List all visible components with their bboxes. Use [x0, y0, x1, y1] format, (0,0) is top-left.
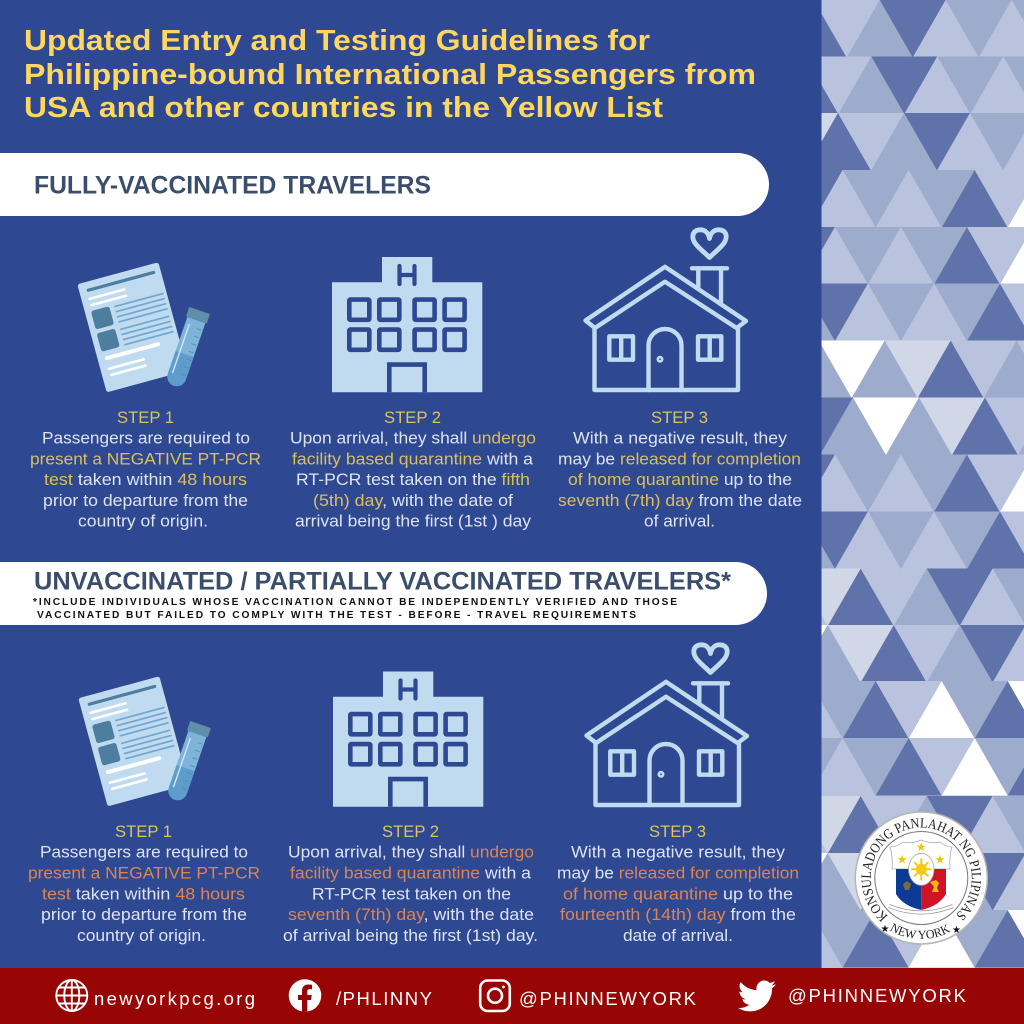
note: unvaccinated definition: *INCLUDE INDIVIDUALS WHOSE VACCINATION CANNOT BE INDEPENDENTLY VERIFIED AND THOSE [33, 597, 677, 608]
text block: step 1 unvaccinated: prior to departure from the [41, 905, 247, 924]
icon: hospital [333, 672, 483, 807]
icon: house with heart [586, 645, 747, 805]
panel: triangle pattern [762, 0, 1024, 968]
text block: step 3 fully vaccinated: may be released for completion [558, 450, 801, 468]
text block: step 2 fully vaccinated: Upon arrival, they shall undergo [290, 428, 536, 448]
seal: Konsuladong Panlahat ng Pilipinas New York: ★ [880, 924, 890, 935]
text block: step 3 fully vaccinated: of home quarantine up to the [568, 470, 792, 489]
text block: step 3 unvaccinated: fourteenth (14th) day from the [560, 905, 796, 924]
title: Philippine-bound International Passengers from [24, 59, 756, 91]
icon: instagram [480, 980, 510, 1011]
text block: step 3 fully vaccinated: STEP 3 [651, 408, 708, 427]
text block: step 2 unvaccinated: seventh (7th) day , with the date [288, 905, 534, 924]
text block: step 3 unvaccinated: With a negative result, they [571, 843, 786, 862]
footer: website: newyorkpcg.org [94, 988, 255, 1009]
title: Updated Entry and Testing Guidelines for [24, 25, 650, 57]
icon: house with heart [586, 230, 746, 390]
title: USA and other countries in the Yellow List [24, 92, 663, 124]
text block: step 2 unvaccinated: Upon arrival, they shall undergo [288, 843, 534, 862]
text block: step 3 unvaccinated: STEP 3 [649, 822, 706, 841]
note: unvaccinated definition [33, 597, 677, 621]
text block: step 1 unvaccinated: test taken within 48 hours [42, 884, 245, 904]
footer: instagram: @PHINNEWYORK [519, 988, 697, 1009]
text block: step 2 unvaccinated: RT-PCR test taken on the [312, 884, 511, 904]
text block: step 2 fully vaccinated [290, 408, 536, 531]
footer: twitter: @PHINNEWYORK [788, 985, 967, 1006]
text block: step 3 fully vaccinated: With a negative result, they [573, 428, 788, 448]
text block: step 2 unvaccinated [283, 822, 538, 945]
text block: step 3 fully vaccinated: seventh (7th) day from the date [558, 491, 802, 510]
footer: website [56, 980, 255, 1011]
text block: step 3 unvaccinated: may be released for completion [557, 864, 799, 882]
text block: step 1 fully vaccinated: Passengers are required to [42, 428, 250, 448]
text block: step 1 unvaccinated [28, 822, 260, 945]
text block: step 2 fully vaccinated: RT-PCR test taken on the fifth [296, 470, 530, 489]
text block: step 1 fully vaccinated: test taken within 48 hours [44, 470, 247, 489]
text block: step 1 fully vaccinated: STEP 1 [117, 408, 174, 427]
seal: Konsuladong Panlahat ng Pilipinas New York: ★ [934, 852, 945, 866]
panel: unvaccinated heading bar [0, 562, 767, 625]
text block: step 2 unvaccinated: facility based quarantine with a [290, 864, 532, 882]
text block: step 1 fully vaccinated [30, 408, 261, 531]
text block: step 3 unvaccinated: date of arrival. [623, 926, 733, 945]
text block: step 1 unvaccinated: present a NEGATIVE PT-PCR [28, 864, 260, 882]
text block: step 2 fully vaccinated: facility based quarantine with a [292, 450, 534, 468]
footer: twitter [738, 981, 967, 1011]
note: unvaccinated definition: VACCINATED BUT FAILED TO COMPLY WITH THE TEST - BEFORE - TRAVEL REQUIREMENTS [37, 610, 636, 621]
seal: Konsuladong Panlahat ng Pilipinas New York: KONSULADONG PANLAHAT NG PILIPINAS [862, 818, 981, 922]
icon: facebook [289, 979, 321, 1012]
footer: facebook: /PHLINNY [336, 988, 432, 1009]
text block: step 2 unvaccinated: STEP 2 [382, 822, 439, 841]
text block: step 1 unvaccinated: Passengers are required to [40, 843, 248, 862]
text block: step 3 unvaccinated [557, 822, 799, 945]
seal: Konsuladong Panlahat ng Pilipinas New York: ★ [916, 840, 927, 854]
text block: step 2 fully vaccinated: arrival being the first (1st ) day [295, 512, 532, 531]
icon: document and test tube [77, 262, 210, 392]
seal: Konsuladong Panlahat ng Pilipinas New York: NEW YORK [890, 923, 951, 939]
text block: step 1 unvaccinated: country of origin. [77, 926, 206, 945]
text block: step 3 fully vaccinated: of arrival. [644, 512, 715, 531]
footer: facebook [289, 979, 432, 1012]
icon: globe [56, 980, 87, 1011]
panel: fully-vaccinated heading bar [0, 153, 769, 216]
heading: unvaccinated travelers: UNVACCINATED / PARTIALLY VACCINATED TRAVELERS* [34, 568, 731, 596]
heading: fully-vaccinated travelers: FULLY-VACCINATED TRAVELERS [34, 172, 431, 200]
footer: instagram [480, 980, 697, 1011]
footer bar background [0, 968, 1024, 1024]
text block: step 3 unvaccinated: of home quarantine up to the [563, 884, 793, 904]
text block: step 3 fully vaccinated [558, 408, 802, 531]
seal: Konsuladong Panlahat ng Pilipinas New York: ★ [897, 852, 908, 866]
panel: main blue background [0, 0, 822, 968]
text block: step 1 unvaccinated: STEP 1 [115, 822, 172, 841]
icon: twitter bird [738, 981, 776, 1011]
text block: step 1 fully vaccinated: prior to departure from the [43, 491, 248, 510]
text block: step 2 fully vaccinated: (5th) day, with the date of [313, 491, 513, 510]
title [24, 25, 756, 124]
text block: step 2 unvaccinated: of arrival being the first (1st) day. [283, 926, 538, 945]
text block: step 1 fully vaccinated: present a NEGATIVE PT-PCR [30, 450, 261, 468]
text block: step 2 fully vaccinated: STEP 2 [384, 408, 441, 427]
icon: hospital [332, 257, 482, 392]
seal: Konsuladong Panlahat ng Pilipinas New York: ★ [952, 925, 961, 936]
text block: step 1 fully vaccinated: country of origin. [78, 512, 208, 531]
icon: document and test tube [78, 676, 211, 806]
